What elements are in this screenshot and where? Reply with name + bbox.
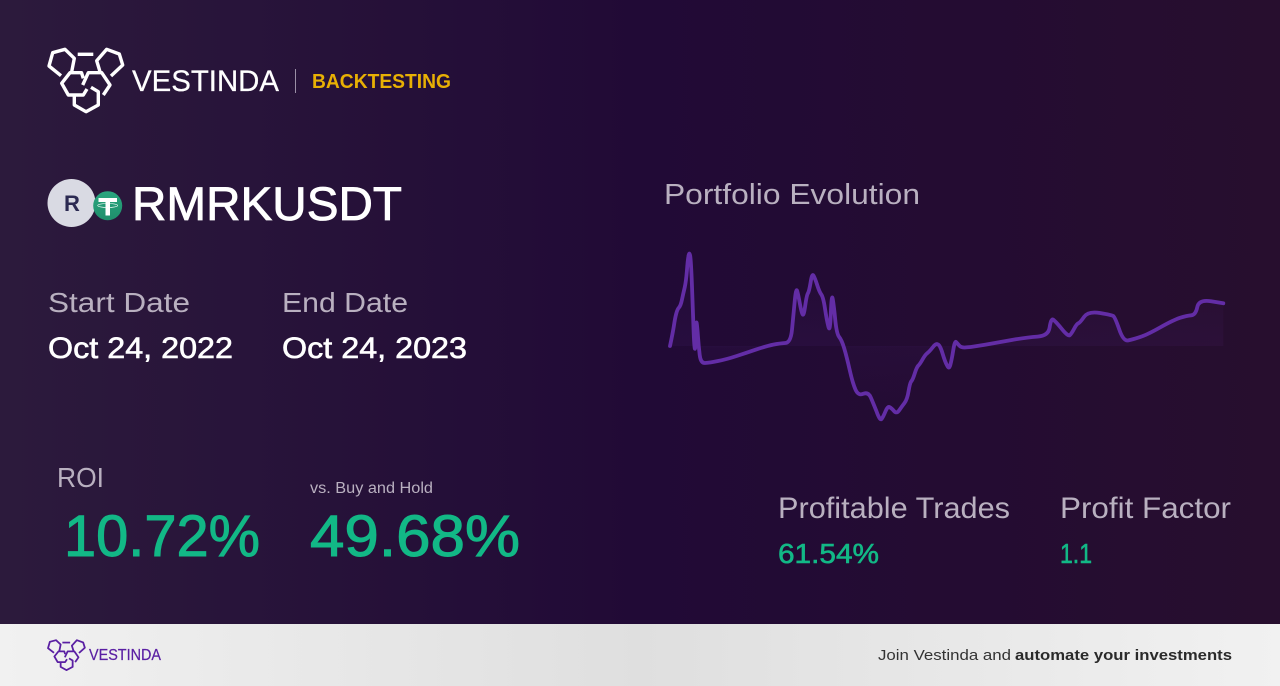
end date: [282, 287, 467, 365]
start date: [48, 287, 233, 365]
buy and hold metric: 49.68%: [310, 504, 520, 569]
buy and hold metric: [310, 480, 520, 569]
chart title: Portfolio Evolution: [664, 179, 920, 211]
ROI metric: [57, 462, 260, 569]
profit factor: 1.1: [1060, 538, 1092, 569]
profit factor: Profit Factor: [1060, 492, 1231, 525]
start date: Start Date: [48, 287, 190, 318]
header: [49, 49, 451, 112]
footer wordmark: VESTINDA: [89, 647, 162, 664]
line chart: [670, 254, 1223, 419]
panel: trading pair: [48, 177, 402, 230]
end date: Oct 24, 2023: [282, 332, 467, 365]
icon: RMRK token: [48, 179, 96, 227]
footer background: [0, 624, 1280, 686]
icon: RMRK token: R: [64, 191, 80, 216]
pair name: RMRKUSDT: [132, 177, 402, 230]
panel: trade stats: [778, 492, 1231, 569]
section label: BACKTESTING: [312, 71, 451, 93]
call to action: automate your investments: [1015, 647, 1232, 664]
ROI metric: 10.72%: [64, 504, 260, 569]
panel: ROI: [57, 462, 520, 569]
call to action: Join Vestinda and: [878, 647, 1011, 664]
divider: [295, 69, 296, 93]
wordmark: VESTINDA: [132, 65, 279, 98]
ROI metric: ROI: [57, 462, 104, 493]
profitable trades: 61.54%: [778, 538, 879, 569]
start date: Oct 24, 2022: [48, 332, 233, 365]
icon: Vestinda logo: [49, 49, 123, 112]
panel: portfolio evolution: [664, 179, 1223, 419]
profitable trades: [778, 492, 1010, 569]
icon: Tether token: [93, 191, 122, 220]
profitable trades: Profitable Trades: [778, 492, 1010, 525]
footer: [0, 624, 1280, 686]
buy and hold metric: vs. Buy and Hold: [310, 480, 433, 497]
profit factor: [1060, 492, 1231, 569]
call to action: [878, 647, 1232, 664]
panel: dates: [48, 287, 467, 365]
icon: footer logo: [48, 640, 85, 670]
end date: End Date: [282, 287, 408, 318]
